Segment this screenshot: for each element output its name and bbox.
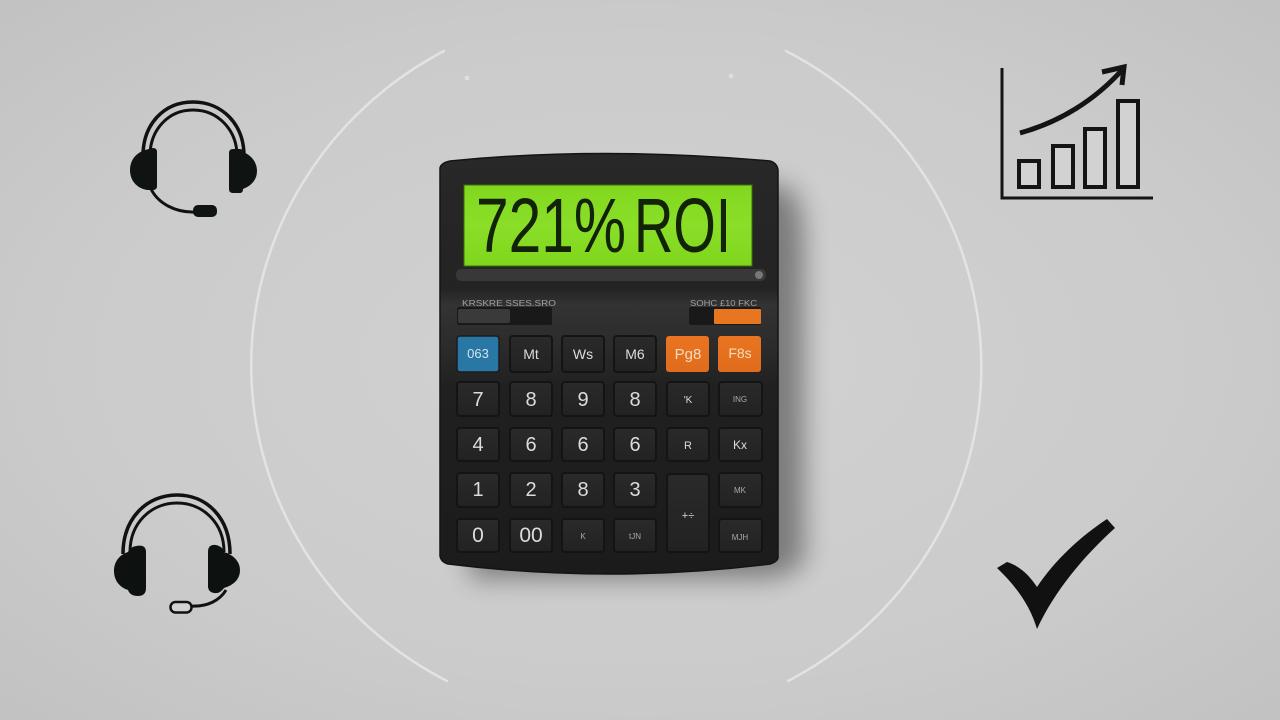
key row: 4 6 6 6 <box>457 428 762 461</box>
key row: 7 8 9 8 <box>457 382 762 416</box>
key row: 1 2 3 3: 1 <box>472 479 484 501</box>
key row: 7 8 9 8: 8 <box>525 389 537 411</box>
switch labels and sliders: SOHC £10 FKC <box>690 299 757 308</box>
key row: 7 8 9 8: ING <box>733 395 747 404</box>
key row: 7 8 9 8: 'K <box>684 395 693 406</box>
key row: 1 2 3 3: MK <box>734 486 747 495</box>
calculator shadow <box>470 185 804 578</box>
key row: 7 8 9 8: 8 <box>629 389 641 411</box>
indicator dot <box>755 271 763 279</box>
key row: function keys <box>457 336 761 372</box>
key row: 4 6 6 6: 6 <box>629 434 641 456</box>
display text: 721% <box>476 183 626 269</box>
arrow <box>1020 70 1122 133</box>
LCD screen <box>464 185 752 266</box>
display panel <box>456 183 766 281</box>
icon: check mark <box>997 519 1115 629</box>
key row: 7 8 9 8: 9 <box>577 389 589 411</box>
key row: function keys: F8s <box>728 345 752 361</box>
axes <box>1002 68 1153 198</box>
key row: function keys: Ws <box>573 346 593 362</box>
key row: function keys: 063 <box>467 346 489 361</box>
key row: 4 6 6 6: Kx <box>733 438 747 452</box>
key row: 0 00: 00 <box>519 524 543 547</box>
switch labels and sliders <box>457 299 761 325</box>
key row: 4 6 6 6: 4 <box>472 434 484 456</box>
key row: 1 2 3 3: 8 <box>577 479 589 501</box>
calculator <box>440 154 778 574</box>
icon: headset bottom left <box>114 495 240 612</box>
calculator body <box>440 154 778 574</box>
key row: 4 6 6 6: R <box>684 440 692 452</box>
key row: function keys: Mt <box>523 346 539 362</box>
icon: headset top left <box>130 102 257 217</box>
key row: 0 00: tJN <box>629 532 641 541</box>
key row: function keys: M6 <box>625 346 645 362</box>
key row: 0 00: MJH <box>732 533 748 542</box>
key row: 4 6 6 6: 6 <box>577 434 589 456</box>
bars <box>1019 101 1138 187</box>
key row: 1 2 3 3: 3 <box>629 479 641 501</box>
key row: 0 00: K <box>580 532 586 541</box>
key row: 0 00: 0 <box>472 524 484 547</box>
decorative ring arcs <box>251 51 981 681</box>
key row: function keys: Pg8 <box>675 346 701 363</box>
key row: 4 6 6 6: 6 <box>525 434 537 456</box>
switch labels and sliders: KRSKRE SSES.SRO <box>462 299 556 308</box>
display text: ROI <box>634 183 731 269</box>
icon: bar chart with rising arrow <box>1002 67 1153 198</box>
key row: 1 2 3 3 <box>457 473 762 552</box>
key row: 1 2 3 3: 2 <box>525 479 537 501</box>
key row: 1 2 3 3: +÷ <box>682 510 694 522</box>
keypad <box>457 336 762 552</box>
key row: 0 00 <box>457 519 762 552</box>
key row: 7 8 9 8: 7 <box>472 389 484 411</box>
